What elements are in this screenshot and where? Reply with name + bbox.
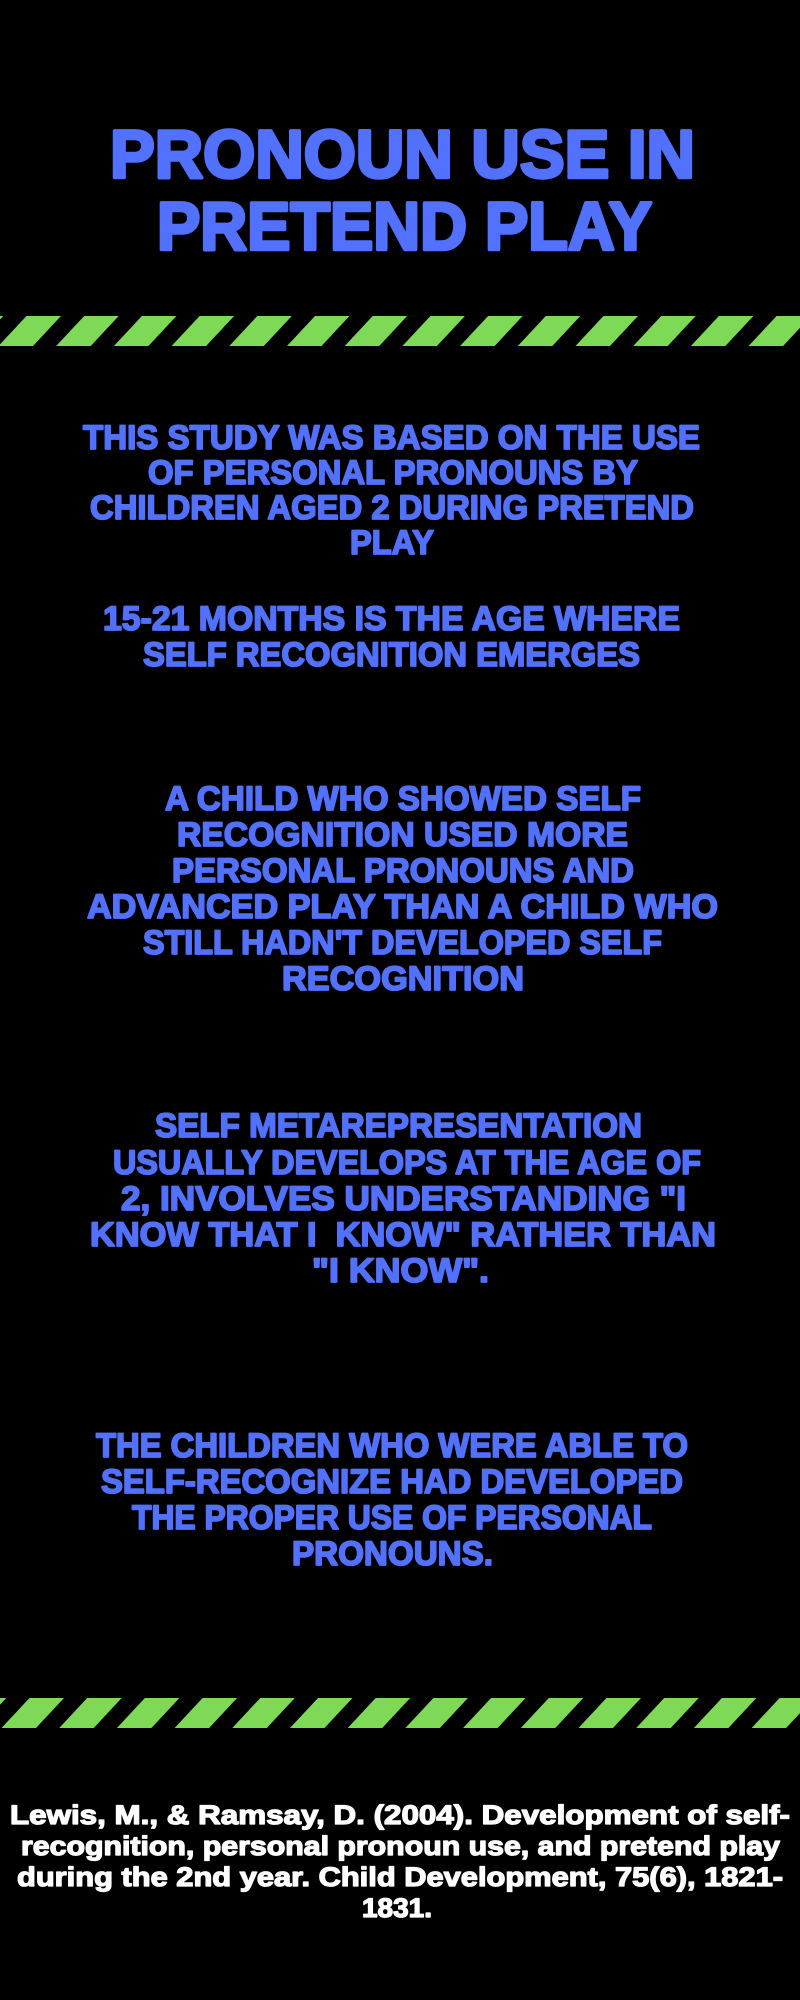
text block: self recognition and play: STILL HADN'T DEVELOPED SELF: [143, 924, 662, 962]
bottom striped divider: [0, 1698, 800, 1728]
reference citation: [10, 1800, 790, 1923]
text block: conclusion: SELF-RECOGNIZE HAD DEVELOPED: [101, 1463, 683, 1501]
text block: self metarepresentation: USUALLY DEVELOPS AT THE AGE OF: [113, 1144, 701, 1182]
text block: self recognition and play: ADVANCED PLAY THAN A CHILD WHO: [87, 888, 718, 926]
title: PRONOUN USE IN: [110, 116, 695, 192]
text block: study basis: CHILDREN AGED 2 DURING PRETEND: [90, 489, 694, 527]
text block: self recognition and play: RECOGNITION: [282, 960, 524, 998]
text block: self recognition and play: RECOGNITION USED MORE: [177, 816, 628, 854]
text block: conclusion: THE CHILDREN WHO WERE ABLE TO: [96, 1427, 688, 1465]
text block: conclusion: THE PROPER USE OF PERSONAL: [132, 1499, 652, 1537]
text block: self metarepresentation: [90, 1107, 716, 1290]
text block: self metarepresentation: 2, INVOLVES UNDERSTANDING "I: [121, 1180, 686, 1218]
reference citation: recognition, personal pronoun use, and pretend play: [21, 1831, 780, 1861]
text block: self recognition and play: [87, 780, 718, 998]
text block: self metarepresentation: KNOW THAT I KNOW" RATHER THAN: [90, 1216, 716, 1254]
text block: self recognition and play: PERSONAL PRONOUNS AND: [172, 852, 634, 890]
text block: study basis: THIS STUDY WAS BASED ON THE USE: [83, 419, 700, 457]
reference citation: 1831.: [362, 1893, 432, 1923]
text block: self metarepresentation: "I KNOW".: [312, 1252, 489, 1290]
text block: conclusion: PRONOUNS.: [292, 1535, 493, 1573]
text block: self recognition age: 15-21 MONTHS IS THE AGE WHERE: [103, 600, 680, 638]
text block: self recognition age: [103, 600, 680, 674]
text block: self recognition and play: A CHILD WHO SHOWED SELF: [165, 780, 641, 818]
text block: study basis: [83, 419, 700, 562]
top striped divider: [0, 316, 800, 346]
title: PRETEND PLAY: [157, 188, 652, 264]
text block: conclusion: [96, 1427, 688, 1573]
text block: study basis: OF PERSONAL PRONOUNS BY: [148, 454, 638, 492]
title: [110, 116, 695, 264]
reference citation: during the 2nd year. Child Development, 75(6), 1821-: [17, 1862, 783, 1892]
reference citation: Lewis, M., & Ramsay, D. (2004). Development of self-: [10, 1800, 790, 1830]
text block: self metarepresentation: SELF METAREPRESENTATION: [155, 1107, 642, 1145]
text block: study basis: PLAY: [350, 524, 434, 562]
text block: self recognition age: SELF RECOGNITION EMERGES: [143, 636, 640, 674]
